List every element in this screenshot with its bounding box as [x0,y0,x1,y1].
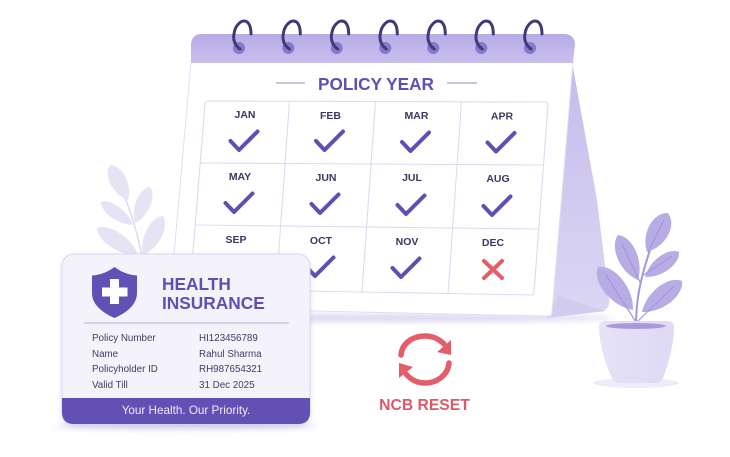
calendar top band [191,34,575,63]
months: APR [491,110,514,122]
months: NOV [396,236,418,248]
months: SEP [225,234,247,246]
months: OCT [310,235,333,247]
reset label: NCB RESET [379,397,470,414]
NCB reset [379,336,470,414]
pot [599,321,674,383]
potted plant [593,213,682,388]
stand fold [546,296,606,318]
card footer band [62,398,310,424]
leaves [597,213,682,322]
months: AUG [486,173,510,185]
calendar back stand [546,62,609,318]
card details: Policyholder ID [92,364,158,375]
icon: reset arrows [399,336,451,383]
month grid [190,101,548,295]
insurance card [54,254,318,430]
card title: INSURANCE [162,293,265,313]
card body [62,254,310,424]
card details: RH987654321 [199,364,262,375]
months [221,109,514,278]
card shadow [54,422,318,430]
card details: 31 Dec 2025 [199,380,255,391]
card title: HEALTH [162,274,231,294]
pot shadow [593,378,679,388]
months: JAN [234,109,256,121]
rings [233,21,542,54]
calendar ground shadow [185,314,615,322]
card details: Name [92,349,119,360]
card tagline: Your Health. Our Priority. [122,404,250,417]
card details: HI123456789 [199,333,258,344]
months: MAR [405,110,429,122]
background plant [97,165,165,256]
card details: Rahul Sharma [199,349,262,360]
months: MAY [229,171,251,183]
card details [92,333,262,391]
card details: Policy Number [92,333,156,344]
calendar page [170,62,573,316]
card details: Valid Till [92,380,128,391]
months: JUL [402,172,423,184]
calendar title: POLICY YEAR [318,74,435,94]
months: JUN [315,172,337,184]
months: FEB [320,110,341,122]
shield icon [92,267,137,318]
months: DEC [482,237,505,249]
red cross [484,261,502,278]
pot opening [606,323,666,329]
plant stems [636,250,650,326]
calendar [170,21,615,322]
